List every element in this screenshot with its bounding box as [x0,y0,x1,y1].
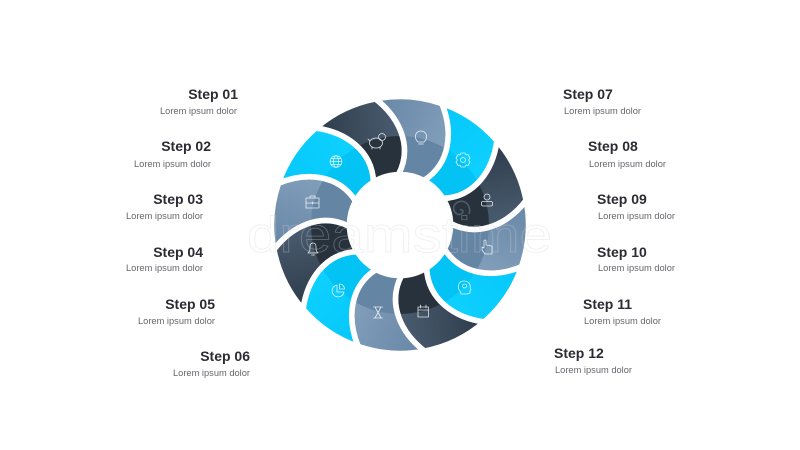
label: step 03: Step 03 [153,191,203,207]
icon: hand pointer [482,240,492,254]
segment: step 02 slate with light bulb icon [375,99,446,178]
label: step 05: Lorem ipsum dolor [138,316,215,326]
label: step 05: Step 05 [165,296,215,312]
label: step 06 [173,348,250,378]
icon: bell [308,243,318,255]
label: step 07: Lorem ipsum dolor [564,106,641,116]
icon: pie chart [332,284,344,297]
icon: briefcase [306,196,319,208]
icon: gear [456,153,470,167]
label: step 11: Step 11 [583,296,632,312]
label: step 02: Lorem ipsum dolor [134,159,211,169]
label: step 08 [588,138,666,169]
label: step 11: Lorem ipsum dolor [584,316,661,326]
icon: hourglass [374,307,382,318]
icon: calendar [418,305,428,317]
label: step 03: Lorem ipsum dolor [126,211,203,221]
label: step 12: Step 12 [554,345,604,361]
label: step 11 [583,296,661,326]
label: step 02 [134,138,211,169]
label: step 03 [126,191,203,221]
label: step 09: Step 09 [597,191,647,207]
label: step 06: Lorem ipsum dolor [173,368,250,378]
segment: step 05 slate with hand pointer icon [448,200,526,270]
label: step 01: Step 01 [188,86,238,102]
segment: step 12 cyan with globe icon [280,126,376,202]
label: step 01 [160,86,238,116]
segment: step 04 dark with person icon [446,142,523,227]
label: step 04 [126,244,203,273]
label: step 12: Lorem ipsum dolor [555,365,632,375]
watermark: dreamstime [247,207,552,263]
label: step 10: Lorem ipsum dolor [598,263,675,273]
segment: step 09 cyan with pie chart icon [306,254,376,344]
label: step 08: Step 08 [588,138,638,154]
label: step 06: Step 06 [200,348,250,364]
label: step 10 [597,244,675,273]
icon: head with dollar [458,281,471,294]
label: step 07: Step 07 [563,86,613,102]
label: step 09: Lorem ipsum dolor [598,211,675,221]
label: step 02: Step 02 [161,138,211,154]
label: step 05 [138,296,215,326]
icon: piggy bank [368,134,386,149]
segment: step 10 dark with bell icon [277,223,354,308]
label: step 07 [563,86,641,116]
icon: person [482,194,492,206]
icon: light bulb [415,131,427,144]
segment: step 07 dark with calendar icon [398,270,483,348]
label: step 08: Lorem ipsum dolor [589,159,666,169]
segment: step 06 cyan with dollar head icon [430,248,520,319]
label: step 10: Step 10 [597,244,647,260]
label: step 09 [597,191,675,221]
label: step 04: Step 04 [153,244,203,260]
watermark spiral [454,201,470,214]
segment: step 01 dark with piggy bank icon [322,102,402,178]
segment: step 11 slate with briefcase icon [274,180,352,250]
label: step 01: Lorem ipsum dolor [160,106,237,116]
label: step 12 [554,345,632,375]
segment: step 08 slate with hourglass icon [354,272,425,351]
segment: step 03 cyan with gear icon [424,106,494,196]
icon: globe [330,156,342,167]
label: step 04: Lorem ipsum dolor [126,263,203,273]
